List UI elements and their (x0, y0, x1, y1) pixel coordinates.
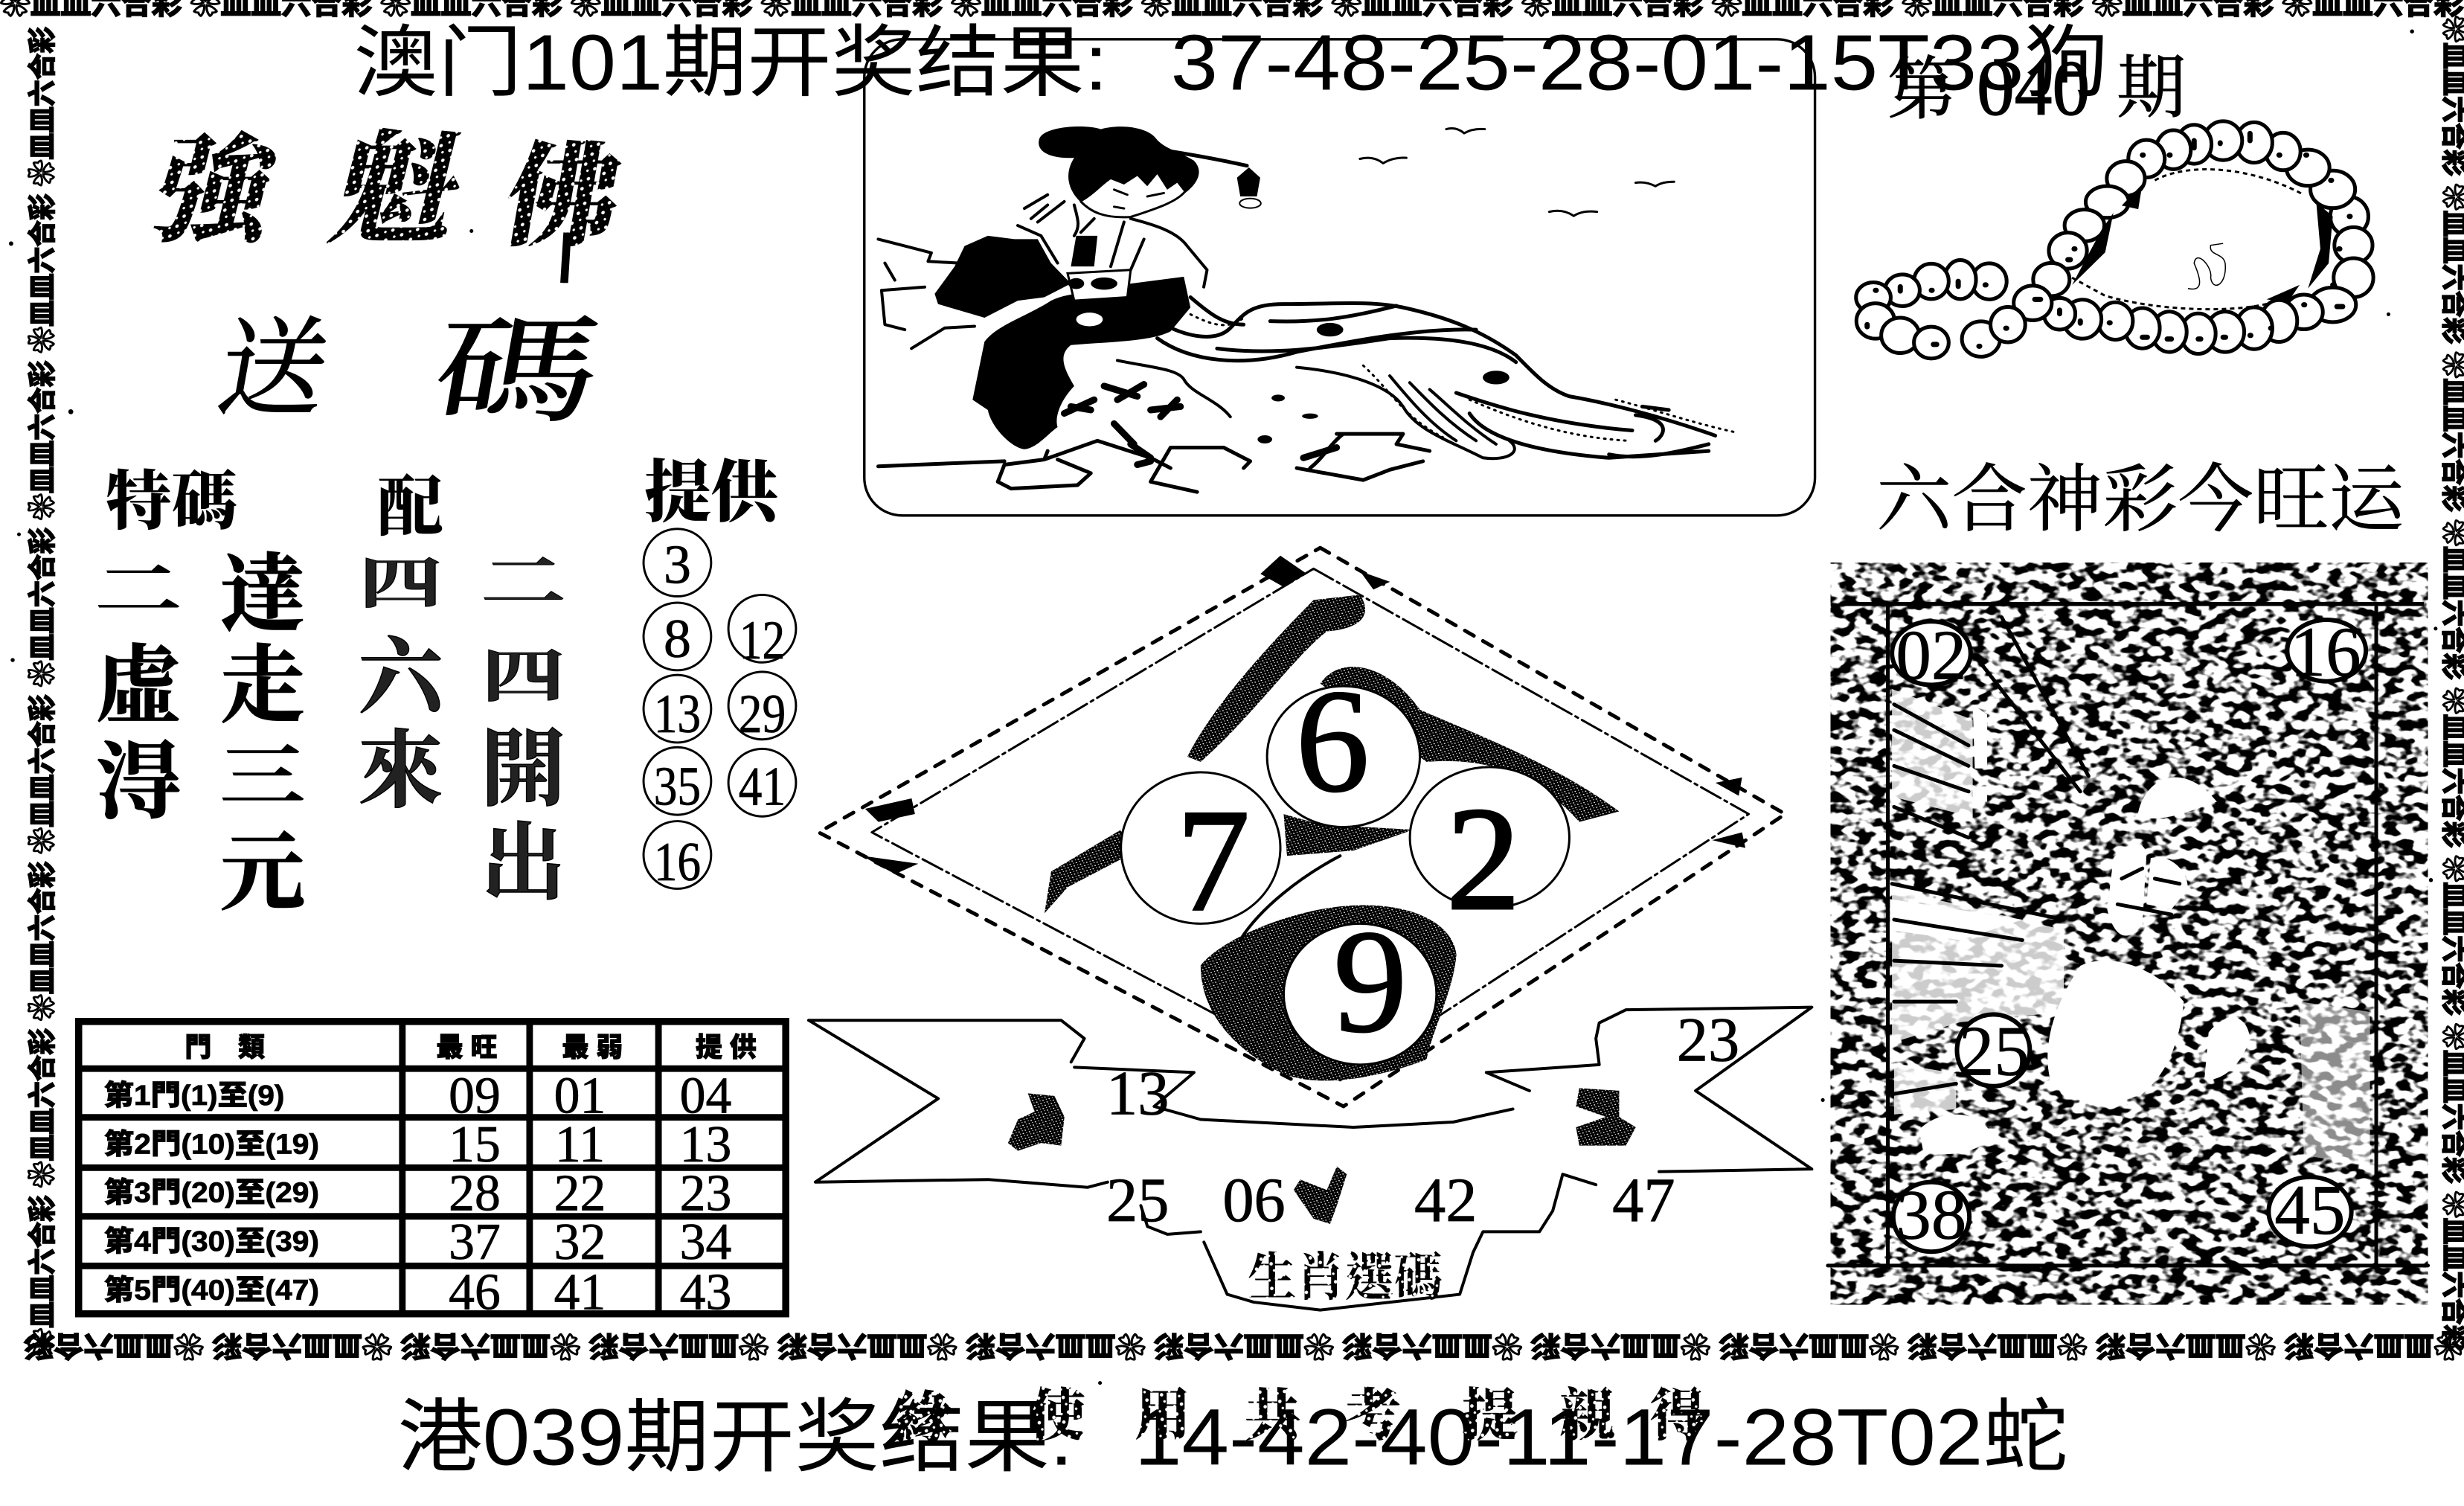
circle 9 (1283, 923, 1437, 1065)
title character 1: 強 (138, 127, 301, 259)
column headings (106, 455, 783, 545)
table values: 46 (449, 1263, 501, 1321)
verse column 2: 元 (220, 826, 305, 920)
number 13: 13 (654, 683, 701, 744)
verse column 4: 出 (481, 817, 565, 911)
table values: 23 (680, 1164, 731, 1222)
table values: 28 (449, 1164, 501, 1222)
title character 2: 魁 (320, 124, 477, 260)
header: Macau result line (353, 19, 2109, 106)
table values: 32 (554, 1214, 606, 1271)
faint overprinted calligraphy: 共 (1245, 1385, 1303, 1447)
heading: special code: 特碼 (106, 466, 237, 537)
heading: match: 配 (377, 472, 443, 545)
faint overprinted calligraphy: 考 (1345, 1385, 1402, 1447)
table row labels: 第2門(10)至(19) (104, 1129, 319, 1160)
number 3: 3 (664, 534, 691, 595)
table header row (185, 1032, 757, 1062)
lucky numbers 6 7 2 9 (1176, 659, 1521, 1063)
issue label start: 第 (1887, 52, 1957, 129)
circle 2 (1410, 767, 1569, 908)
verse column 4: 四 (481, 645, 565, 709)
number 47: 47 (1612, 1166, 1675, 1235)
number 29: 29 (739, 683, 786, 744)
number 35: 35 (654, 755, 701, 816)
number 12: 12 (739, 609, 785, 670)
faint overprinted calligraphy: 使 (1030, 1385, 1086, 1447)
verse column 1: 淂 (96, 735, 181, 830)
table values: 22 (554, 1164, 606, 1222)
verse column 2 (220, 548, 305, 920)
number 13: 13 (1106, 1059, 1170, 1128)
number 8 (644, 603, 711, 670)
digit 9: 9 (1333, 900, 1407, 1063)
Buddha panel numbers: 38 (1896, 1175, 1966, 1254)
faint overprinted calligraphy: 用 (1135, 1385, 1191, 1447)
table frame and grid (79, 1022, 786, 1314)
table row labels: 第5門(40)至(47) (104, 1275, 319, 1307)
verse column 3: 四 (359, 553, 443, 615)
heading: lucky fortune: 六合神彩今旺运 (1876, 460, 2404, 541)
ribbon caption: 生肖選碼 (1248, 1249, 1443, 1307)
number 29 (728, 672, 796, 744)
table values (449, 1067, 731, 1321)
illustration: reclining lady (878, 126, 1735, 492)
verse column 2: 達 (220, 548, 305, 642)
verse column 4: 開 (481, 722, 565, 817)
Buddha panel numbers: 45 (2274, 1170, 2345, 1249)
inner diamond outline (872, 568, 1749, 1080)
faint overprinted calligraphy: 得 (1650, 1385, 1707, 1447)
number 45 (2268, 1177, 2352, 1246)
Buddha panel numbers: 25 (1959, 1012, 2030, 1091)
number 12 (728, 595, 796, 670)
number 02 (1892, 621, 1971, 685)
table header row: 提 供 (696, 1032, 757, 1062)
digit 6: 6 (1296, 659, 1370, 822)
number 25 (1957, 1014, 2030, 1086)
Hong Kong draw label: 港039期开奖结果: (397, 1391, 1074, 1481)
ribbon strokes (1045, 595, 1619, 913)
number 23: 23 (1677, 1006, 1739, 1075)
number 38 (1893, 1182, 1969, 1252)
verse column 4: 二 (481, 549, 565, 617)
table header row: 門 類 (185, 1032, 265, 1062)
table values: 13 (680, 1116, 731, 1173)
faint overprinted calligraphy: 緣 (896, 1388, 952, 1451)
number 42: 42 (1414, 1166, 1477, 1235)
ribbon numbers (1106, 1006, 1739, 1235)
number 8: 8 (664, 608, 691, 669)
zodiac ribbon (809, 1007, 1812, 1310)
ribbon loop under nine (1201, 906, 1457, 1080)
table values: 41 (554, 1263, 606, 1321)
woodcut texture (1831, 563, 2428, 1304)
picture frame (864, 39, 1815, 516)
number 3 (644, 529, 711, 597)
verse column 2: 走 (220, 639, 305, 734)
Buddha panel numbers (1896, 612, 2361, 1254)
circled numbers list (644, 529, 796, 892)
issue label end: 期 (2117, 51, 2186, 127)
table: door groups (79, 1022, 786, 1321)
digit 2: 2 (1446, 777, 1521, 941)
faint overprinted calligraphy (896, 1385, 1707, 1451)
Buddha panel numbers: 02 (1896, 615, 1966, 694)
circle 7 (1121, 772, 1280, 923)
table row labels: 第4門(30)至(39) (104, 1226, 319, 1257)
Macau draw numbers: 37-48-25-28-01-15T33狗 (1171, 19, 2109, 106)
heading: provided: 提供 (644, 455, 783, 531)
verse column 1: 虛 (96, 639, 181, 734)
corner ornaments (862, 556, 1745, 874)
Buddha panel numbers: 16 (2290, 612, 2361, 691)
verse column 3: 來 (359, 724, 443, 818)
number 16: 16 (654, 831, 701, 892)
panel: Buddha woodcut (1828, 563, 2428, 1304)
verse column 4 (481, 549, 565, 911)
title character 3 tail (562, 233, 569, 283)
verse column 3 (359, 553, 450, 818)
table values: 01 (554, 1067, 606, 1124)
number 25: 25 (1106, 1166, 1170, 1235)
table values: 34 (680, 1214, 731, 1271)
dashed diamond outline (818, 548, 1786, 1106)
circle 6 (1267, 686, 1420, 827)
verse column 1: 二 (95, 557, 182, 624)
table values: 04 (680, 1067, 731, 1124)
table values: 37 (449, 1214, 501, 1271)
table header row: 最 旺 (437, 1032, 497, 1062)
woodcut figure (1828, 602, 2428, 1266)
faint overprinted calligraphy: 提 (1461, 1385, 1518, 1447)
table values: 11 (555, 1116, 605, 1173)
title character 4: 送 (210, 311, 337, 429)
table row labels: 第1門(1)至(9) (104, 1080, 284, 1112)
icon: dragon (1576, 1088, 1636, 1146)
verse columns (95, 548, 565, 920)
calligraphy title (138, 124, 631, 438)
verse column 3: 六 (359, 631, 450, 725)
issue digits: 040 (1977, 45, 2090, 132)
table header row: 最 弱 (562, 1032, 623, 1062)
faint overprinted calligraphy: 親 (1559, 1385, 1615, 1447)
header: Hong Kong result line (397, 1385, 2068, 1481)
bottom ornamental band: ❀皿皿六合彩 ❀皿皿六合彩 ❀皿皿六合彩 ❀皿皿六合彩 ❀皿皿六合彩 ❀皿皿六合彩 ❀皿皿六合彩 ❀皿皿六合彩 ❀皿皿六合彩 ❀皿皿六合彩 ❀皿皿六合彩 ❀皿皿六合彩 ❀皿皿六合彩 (24, 1329, 2464, 1360)
verse column 1 (95, 557, 182, 830)
icon: rooster (1294, 1167, 1347, 1224)
Macau draw label: 澳门101期开奖结果: (353, 19, 1108, 106)
title character 5: 碼 (423, 309, 609, 438)
issue number (1887, 45, 2186, 132)
digit 7: 7 (1176, 778, 1250, 942)
Hong Kong draw numbers: 14-42-40-11-17-28T02蛇 (1135, 1391, 2068, 1481)
panel: lady illustration (864, 39, 1815, 516)
number 16 (2287, 620, 2366, 682)
verse column 2: 三 (220, 740, 305, 816)
icon: tiger (1008, 1093, 1065, 1151)
number 41: 41 (739, 755, 786, 816)
table values: 09 (449, 1067, 501, 1124)
table values: 15 (449, 1116, 501, 1173)
table values: 43 (680, 1263, 731, 1321)
table row labels: 第3門(20)至(29) (104, 1178, 319, 1209)
title character 3: 佛 (495, 135, 631, 261)
panel: diamond with numbers (809, 548, 1812, 1310)
table row labels (104, 1080, 319, 1307)
number 06: 06 (1222, 1166, 1286, 1235)
icon: bead bracelet with snake (1856, 121, 2373, 359)
